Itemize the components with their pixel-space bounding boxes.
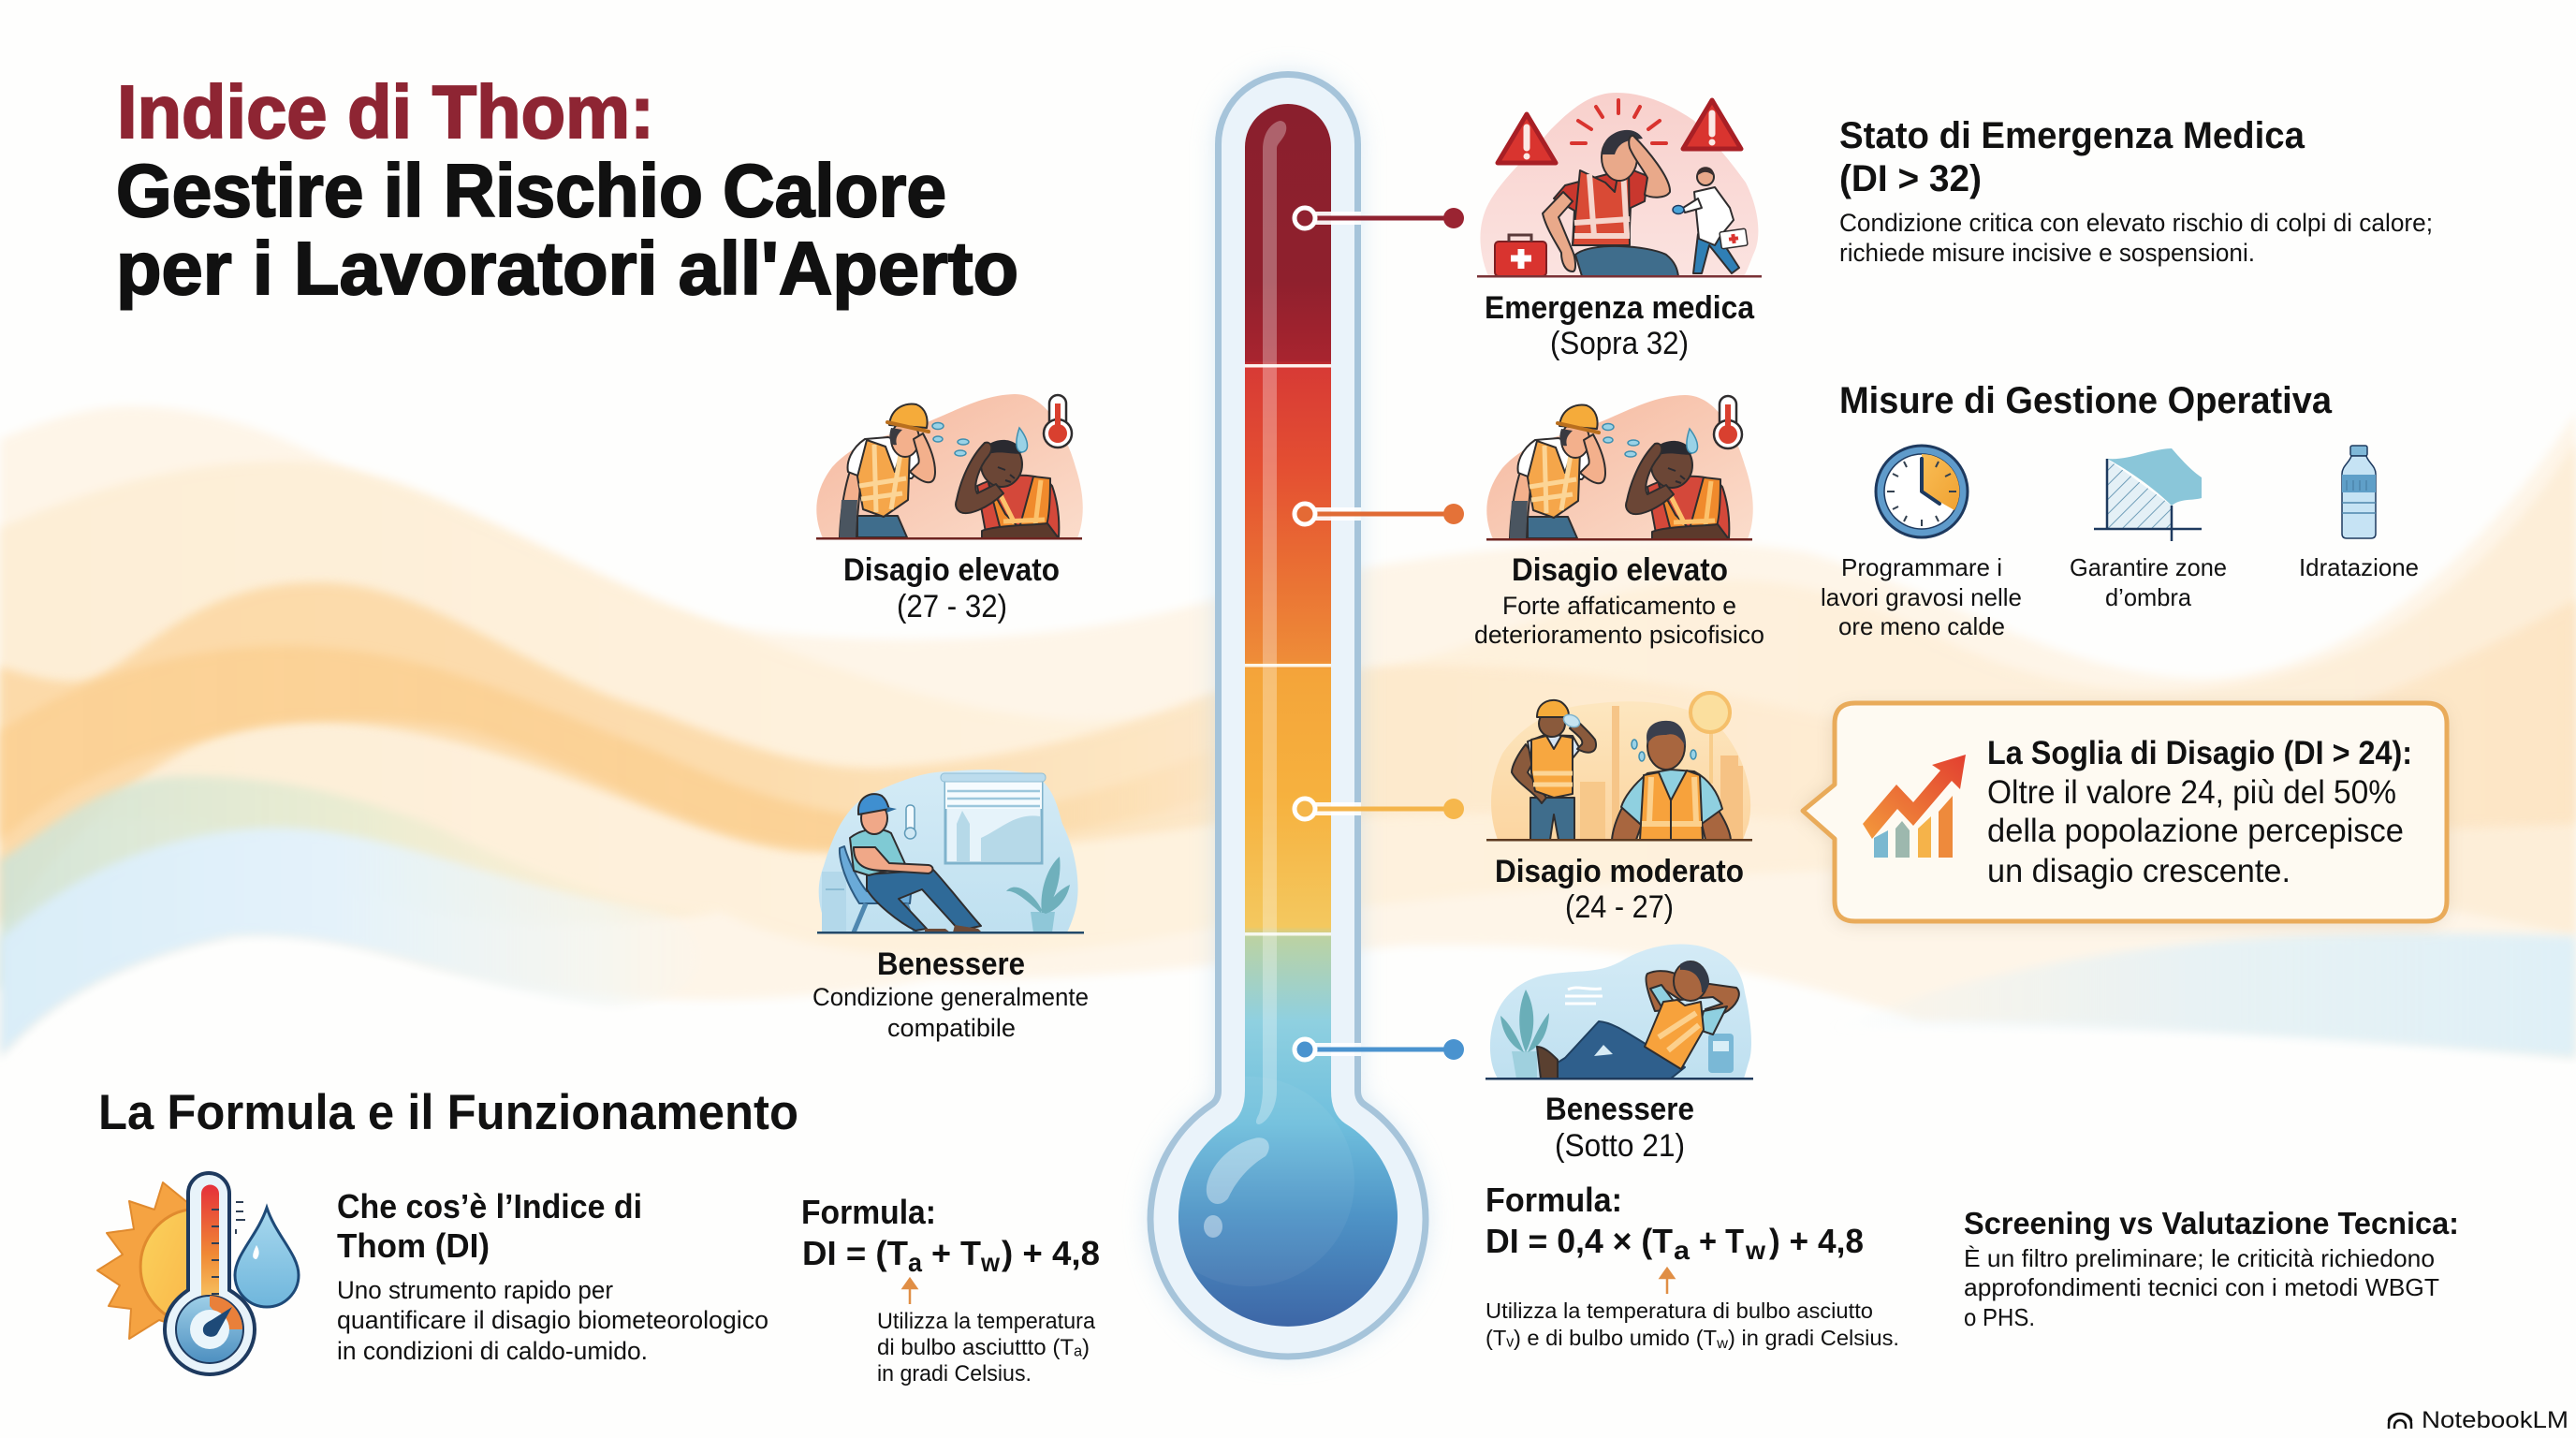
text block: che cos'è l'indice di thom: Uno strumento rapido per: [337, 1276, 613, 1304]
caption: disagio elevato 27-32: Disagio elevato: [843, 552, 1060, 588]
label: garantire zone d'ombra: d’ombra: [2105, 583, 2192, 611]
panel: benessere (right): [1486, 944, 1753, 1164]
label: programmare i lavori gravosi: Programmare i: [1841, 553, 2002, 581]
caption: benessere condizione compatibile: Benessere: [877, 946, 1025, 982]
icon: shade canopy: [2094, 448, 2202, 541]
formula: right: a: [1674, 1236, 1690, 1265]
callout text: della popolazione percepisce: [1987, 813, 2404, 849]
caption: emergenza medica sopra 32: Emergenza medica: [1485, 290, 1755, 326]
icon: sun thermometer and water drop: [97, 1173, 299, 1374]
caption: benessere condizione compatibile: [812, 946, 1089, 1042]
icon: water bottle: [2342, 446, 2376, 538]
heading: misure di gestione operativa: Misure di Gestione Operativa: [1839, 380, 2333, 421]
formula: right: ) + 4,8: [1769, 1222, 1864, 1260]
caption: benessere sotto 21: [1545, 1092, 1694, 1164]
thermometer: [1145, 74, 1464, 1357]
text block: screening vs valutazione tecnica: approfondimenti tecnici con i metodi WBGT: [1964, 1273, 2439, 1301]
label: garantire zone d'ombra: [2070, 553, 2227, 611]
caption: emergenza medica sopra 32: [1485, 290, 1755, 361]
label: idratazione: Idratazione: [2299, 553, 2419, 581]
caption: benessere condizione compatibile: compatibile: [887, 1014, 1016, 1042]
caption: disagio moderato 24-27: (24 - 27): [1565, 889, 1674, 925]
title: Indice di Thom:: [117, 70, 654, 154]
note: formula left: di bulbo asciuttto (Tₐ): [877, 1335, 1090, 1360]
note: formula left: [877, 1309, 1096, 1387]
illustration: worker resting indoors: [817, 770, 1084, 934]
illustration: worker in emergency with doctor: [1477, 93, 1762, 277]
illustration: two tired workers (left): [816, 394, 1083, 539]
callout: la soglia di disagio: [1802, 703, 2447, 923]
formula: left: DI = (T: [802, 1234, 908, 1272]
icon: rising chart: [1863, 755, 1966, 858]
connector: disagio elevato: [1295, 504, 1464, 524]
formula: right: w: [1745, 1236, 1765, 1265]
connector: disagio moderato: [1295, 799, 1464, 819]
formula: right: Formula:: [1486, 1181, 1622, 1219]
text block: stato di emergenza medica: Condizione critica con elevato rischio di colpi di calore;: [1839, 209, 2433, 237]
note: formula left: in gradi Celsius.: [877, 1361, 1032, 1387]
text block: che cos'è l'indice di thom: in condizioni di caldo-umido.: [337, 1337, 648, 1365]
text block: stato di emergenza medica: (DI > 32): [1839, 158, 1982, 199]
note: formula right: [1486, 1299, 1899, 1352]
caption: disagio elevato 27-32: [843, 552, 1060, 624]
caption: benessere condizione compatibile: Condizione generalmente: [812, 983, 1089, 1011]
formula: right: [1486, 1181, 1899, 1352]
callout text: Oltre il valore 24, più del 50%: [1987, 774, 2396, 811]
callout text: un disagio crescente.: [1987, 853, 2291, 889]
formula: left: a: [908, 1248, 922, 1277]
formula: right: + T: [1699, 1222, 1744, 1260]
text block: stato di emergenza medica: richiede misure incisive e sospensioni.: [1839, 239, 2255, 267]
panel: disagio moderato: [1486, 693, 1752, 925]
label: garantire zone d'ombra: Garantire zone: [2070, 553, 2227, 581]
title: per i Lavoratori all'Aperto: [116, 227, 1018, 310]
note: formula right: (Tᵥ) e di bulbo umido (T: [1486, 1326, 1710, 1350]
callout text: [1987, 735, 2412, 889]
text block: stato di emergenza medica: Stato di Emergenza Medica: [1839, 115, 2305, 156]
caption: emergenza medica sopra 32: (Sopra 32): [1550, 326, 1689, 361]
label: programmare i lavori gravosi: lavori gravosi nelle: [1821, 583, 2022, 611]
note: formula left: Utilizza la temperatura: [877, 1309, 1096, 1334]
text block: screening vs valutazione tecnica: o PHS.: [1964, 1303, 2035, 1331]
text block: che cos'è l'indice di thom: quantificare il disagio biometeorologico: [337, 1306, 768, 1334]
text block: screening vs valutazione tecnica: È un filtro preliminare; le criticità richiedono: [1964, 1244, 2435, 1272]
formula: left: [801, 1193, 1100, 1387]
text block: che cos'è l'indice di thom: Thom (DI): [337, 1226, 490, 1265]
text block: screening vs valutazione tecnica: [1964, 1206, 2459, 1331]
title: Gestire il Rischio Calore: [116, 149, 946, 232]
text block: che cos'è l'indice di thom: [337, 1187, 768, 1365]
illustration: two workers sweating: [1486, 693, 1752, 841]
caption: benessere sotto 21: Benessere: [1545, 1092, 1694, 1127]
notebooklm logo: NotebookLM: [2422, 1407, 2569, 1433]
arrow: formula right: [1661, 1269, 1674, 1294]
panel: disagio elevato (right): [1474, 395, 1764, 649]
title: [116, 70, 1018, 310]
icon: clock: [1876, 446, 1968, 537]
note: formula right: w: [1716, 1336, 1728, 1352]
illustration: two tired workers (right): [1486, 395, 1753, 541]
formula: left: w: [980, 1248, 1000, 1277]
formula: left: ) + 4,8: [1002, 1234, 1100, 1272]
caption: disagio elevato forte affaticamento: deterioramento psicofisico: [1474, 621, 1764, 649]
panel: benessere (left): [812, 770, 1089, 1042]
connector: benessere: [1295, 1039, 1464, 1060]
note: formula right: Utilizza la temperatura di bulbo asciutto: [1486, 1299, 1873, 1323]
caption: disagio moderato 24-27: Disagio moderato: [1495, 854, 1744, 889]
arrow: formula left: [903, 1279, 916, 1304]
formula: right: DI = 0,4 × (T: [1486, 1222, 1673, 1260]
callout text: La Soglia di Disagio (DI > 24):: [1987, 735, 2412, 771]
caption: benessere sotto 21: (Sotto 21): [1555, 1128, 1685, 1164]
caption: disagio elevato forte affaticamento: Forte affaticamento e: [1502, 592, 1736, 620]
note: formula right: ) in gradi Celsius.: [1728, 1326, 1899, 1350]
connector: emergenza medica: [1295, 208, 1464, 228]
label: programmare i lavori gravosi: [1821, 553, 2022, 640]
text block: che cos'è l'indice di thom: Che cos’è l’Indice di: [337, 1187, 642, 1225]
caption: disagio elevato forte affaticamento: [1474, 552, 1764, 649]
caption: disagio moderato 24-27: [1495, 854, 1744, 925]
text block: stato di emergenza medica: [1839, 115, 2433, 267]
label: programmare i lavori gravosi: ore meno calde: [1838, 612, 2005, 640]
panel: disagio elevato (left): [816, 394, 1083, 624]
caption: disagio elevato forte affaticamento: Disagio elevato: [1512, 552, 1728, 588]
text block: screening vs valutazione tecnica: Screening vs Valutazione Tecnica:: [1964, 1206, 2459, 1240]
illustration: worker reclining: [1486, 944, 1753, 1080]
panel: emergenza medica: [1477, 93, 1762, 361]
caption: disagio elevato 27-32: (27 - 32): [897, 589, 1007, 624]
formula: left: Formula:: [801, 1193, 936, 1231]
panel: misure di gestione operativa: [1821, 380, 2419, 640]
heading: la formula e il funzionamento: La Formula e il Funzionamento: [98, 1085, 798, 1140]
formula: left: + T: [931, 1234, 981, 1272]
